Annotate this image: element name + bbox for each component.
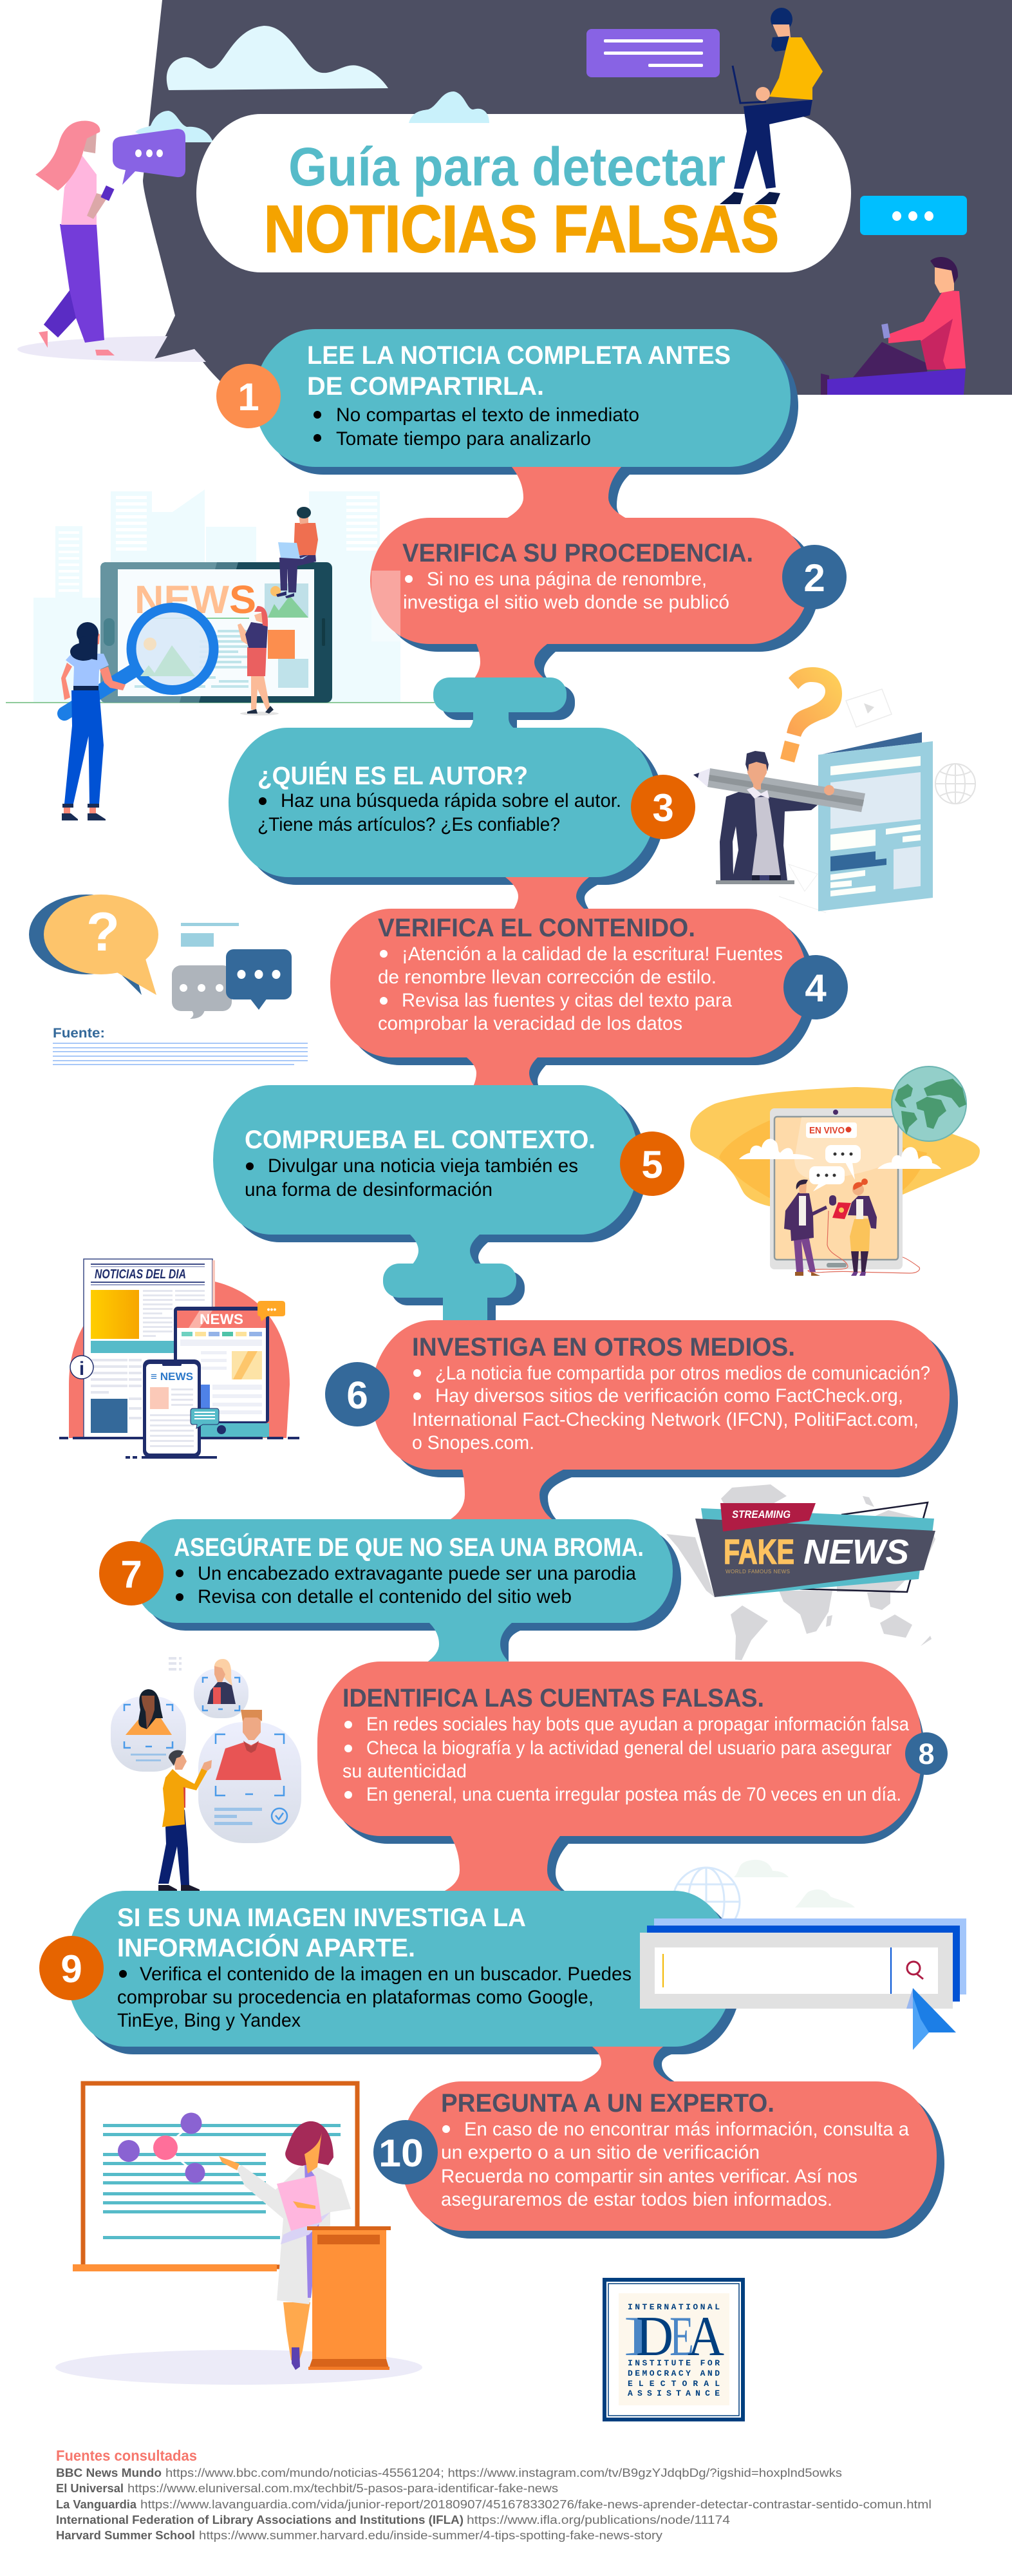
pencil [707, 768, 865, 812]
newspaper title: NOTICIAS DEL DIA [95, 1267, 186, 1282]
step 3 text: ¿Tiene más artículos? ¿Es confiable? [258, 814, 560, 835]
step 10 text: aseguraremos de estar todos bien informados. [441, 2189, 832, 2210]
step 7 text: Revisa con detalle el contenido del sitio web [198, 1586, 572, 1607]
illustration: live interview on tablet [690, 1066, 980, 1276]
folder [277, 2175, 322, 2231]
connector 2 to 3 [474, 644, 556, 683]
step 2 text [403, 569, 729, 613]
phone news word: ≡ NEWS [151, 1370, 193, 1383]
author head [747, 762, 767, 790]
badge 2: 2 [803, 556, 825, 600]
gray chat bubble [172, 965, 232, 1011]
streaming label: STREAMING [732, 1508, 791, 1520]
speech bubbles [825, 1145, 861, 1163]
step 6 text: ¿La noticia fue compartida por otros medios de comunicación? [435, 1363, 930, 1384]
fake word: FAKE [724, 1533, 794, 1571]
step 4 text: ¡Atención a la calidad de la escritura! Fuentes [402, 943, 783, 965]
step 10 panel [373, 2081, 944, 2239]
step 7 text [176, 1563, 636, 1607]
illustration: fake profiles [111, 1657, 301, 1891]
man on tablet with laptop [279, 554, 316, 592]
small bars [181, 923, 239, 926]
connector 3 to 4 [505, 877, 597, 914]
badge 8: 8 [918, 1738, 935, 1770]
illustration: live interview on tablet: EN VIVO [809, 1125, 845, 1136]
connector pad teal with neck [433, 677, 575, 734]
step 10 text: un experto o a un sitio de verificación [441, 2142, 760, 2163]
badge 5 [620, 1132, 684, 1196]
badge 1: 1 [238, 375, 259, 419]
profile card big [198, 1722, 301, 1843]
skyline tint over panel [371, 571, 400, 641]
sources list [56, 2467, 932, 2542]
connector 1 to 2 [505, 467, 636, 526]
step 6 panel [325, 1320, 958, 1477]
connector pad teal with neck 2 [383, 1264, 525, 1324]
step 4 text: comprobar la veracidad de los datos [378, 1013, 682, 1034]
illustration: news on devices: ••• [267, 1304, 276, 1314]
logo: International IDEA: INTERNATIONAL [628, 2302, 720, 2312]
cursor arrow [906, 1988, 913, 2009]
illustration: author with pencil and brochure [693, 667, 975, 913]
brochure [823, 732, 922, 754]
illustration: presenter with board [55, 2083, 422, 2385]
step 3 text: Haz una búsqueda rápida sobre el autor. [281, 790, 621, 811]
board [83, 2083, 357, 2267]
connector 4 to 5 [467, 1057, 546, 1092]
icon: purple text message [586, 29, 720, 77]
badge 2 [782, 545, 847, 609]
step 7 panel [99, 1519, 681, 1631]
logo: International IDEA: E [670, 2306, 694, 2368]
phone [143, 1359, 201, 1457]
step 2 text: investiga el sitio web donde se publicó [403, 592, 729, 613]
connector 7 to 8 [426, 1623, 520, 1664]
badge 10 [373, 2120, 438, 2184]
step 5 panel [213, 1085, 684, 1242]
hand [293, 2201, 315, 2209]
step 1 bullets: No compartas el texto de inmediato [336, 404, 639, 426]
step 5 heading: COMPRUEBA EL CONTEXTO. [245, 1126, 595, 1154]
badge 4 [783, 955, 848, 1019]
step 7 text: Un encabezado extravagante puede ser una parodia [198, 1563, 636, 1584]
illustration: news on devices [59, 1259, 299, 1459]
badge 9: 9 [61, 1947, 82, 1991]
tablet [174, 1307, 269, 1423]
salmon dome [69, 1277, 290, 1438]
profile card left [111, 1696, 186, 1772]
badge 8 [905, 1732, 948, 1775]
step 10 text: Recuerda no compartir sin antes verificar. Así nos [441, 2166, 857, 2187]
icon: cyan typing bubble [860, 196, 967, 235]
tablet news word: NEWS [200, 1311, 243, 1327]
step 8 text: En general, una cuenta irregular postea más de 70 veces en un día. [366, 1784, 901, 1805]
magnifying glass [64, 672, 132, 714]
sources list: https://www.bbc.com/mundo/noticias-45561204; https://www.instagram.com/tv/B9gzYJdqbDg/?igshid=hoxplnd5owks [165, 2467, 842, 2479]
step 9 text: TinEye, Bing y Yandex [117, 2010, 301, 2031]
title panel [196, 114, 851, 272]
illustration: question and chat bubbles: ? [86, 902, 120, 963]
step 9 heading line 2: INFORMACIÓN APARTE. [117, 1933, 415, 1962]
logo: International IDEA: INSTITUTE FOR [628, 2358, 720, 2368]
blonde avatar [207, 1682, 236, 1704]
title line 2: NOTICIAS FALSAS [264, 192, 779, 266]
logo: International IDEA: ASSISTANCE [628, 2389, 720, 2398]
blue chat bubble [226, 949, 292, 999]
envelope outlines [779, 864, 826, 913]
step 10 heading: PREGUNTA A UN EXPERTO. [441, 2089, 774, 2117]
tablet [100, 562, 332, 703]
logo: International IDEA: ELECTORAL [628, 2379, 720, 2389]
badge 7: 7 [120, 1553, 142, 1596]
illustration: news on devices: i [79, 1358, 84, 1379]
step 1 bullets: Tomate tiempo para analizarlo [336, 428, 591, 450]
illustration: man sitting with phone [821, 257, 966, 395]
step 8 panel [317, 1662, 948, 1844]
woman shadow [17, 336, 206, 362]
news wordmark: NEWS [135, 578, 256, 621]
source lines [53, 1043, 308, 1065]
mic cable [808, 1211, 919, 1273]
step 9 text [117, 1964, 632, 2031]
illustration: question and chat bubbles [29, 895, 292, 1019]
info bubble [70, 1356, 93, 1379]
icon: purple bubble [113, 129, 185, 185]
news word: NEWS [803, 1533, 909, 1571]
step 2 heading: VERIFICA SU PROCEDENCIA. [402, 539, 753, 567]
hair and face [285, 2121, 333, 2166]
step 1 bullets [314, 404, 639, 450]
step 6 text: o Snopes.com. [412, 1432, 534, 1454]
play card [846, 689, 892, 727]
globe [935, 764, 975, 804]
step 1 panel [216, 329, 798, 475]
standing man [158, 1810, 189, 1885]
step 10 text: En caso de no encontrar más información, consulta a [464, 2119, 909, 2140]
step 10 text [441, 2119, 909, 2210]
clouds [739, 1139, 814, 1159]
profile card top [194, 1669, 248, 1718]
step 1 heading line 2: DE COMPARTIRLA. [307, 372, 544, 401]
presenter leg [283, 2302, 310, 2360]
step 4 heading: VERIFICA EL CONTENIDO. [378, 914, 695, 942]
connector 5 to pad [410, 1235, 488, 1269]
badge 6: 6 [346, 1374, 368, 1417]
badge 5: 5 [641, 1143, 663, 1186]
step 4 panel [330, 909, 848, 1065]
newspaper [84, 1259, 212, 1438]
icon: large cloud [167, 26, 388, 90]
step 4 text [378, 943, 783, 1034]
question mark [787, 667, 842, 737]
title line 1: Guía para detectar [288, 137, 726, 197]
big question bubble [29, 895, 144, 974]
icon: cloud behind bubble [135, 111, 213, 142]
badge 7 [99, 1541, 164, 1605]
step 4 text: Revisa las fuentes y citas del texto para [402, 990, 732, 1011]
woman avatar [126, 1718, 172, 1735]
step 5 text [245, 1155, 578, 1200]
network nodes [129, 2125, 195, 2173]
logo: International IDEA: A [688, 2306, 724, 2368]
podium [312, 2230, 386, 2360]
step 3 heading: ¿QUIÉN ES EL AUTOR? [258, 761, 528, 790]
orange chat [258, 1301, 285, 1321]
woman in skirt [240, 712, 279, 715]
badge 6 [325, 1362, 389, 1426]
illustration: man sitting on title with laptop [720, 8, 823, 204]
sources list: La Vanguardia [56, 2498, 137, 2511]
illustration: pale globe and clouds [673, 1860, 855, 1936]
step 7 heading: ASEGÚRATE DE QUE NO SEA UNA BROMA. [174, 1532, 644, 1562]
fake news banner [695, 1502, 935, 1597]
step 3 panel [229, 728, 695, 885]
step 2 text: Si no es una página de renombre, [427, 569, 707, 590]
baselines [59, 1437, 299, 1459]
illustration: news tablet with people [6, 507, 435, 820]
step 9 text: Verifica el contenido de la imagen en un buscador. Puedes [140, 1964, 632, 1985]
step 1 heading: LEE LA NOTICIA COMPLETA ANTES [307, 341, 731, 370]
book [832, 1202, 851, 1219]
step 8 text: En redes sociales hay bots que ayudan a propagar información falsa [366, 1714, 909, 1735]
sources list: https://www.lavanguardia.com/vida/junior-report/20180907/451678330276/fake-news-aprender-detectar-contrastar-sentido-comun.html [140, 2498, 932, 2511]
floor shadow [55, 2350, 422, 2385]
step 8 text [342, 1714, 909, 1805]
globe [892, 1066, 966, 1141]
man avatar [216, 1742, 281, 1780]
badge 1 [216, 364, 281, 428]
logo: International IDEA: DEMOCRACY AND [628, 2369, 720, 2378]
badge 10: 10 [379, 2132, 424, 2175]
coat [237, 2161, 351, 2304]
step 9 panel [39, 1891, 742, 2054]
step 2 panel [370, 518, 847, 652]
step 3 text [258, 790, 621, 835]
teal chat [191, 1408, 219, 1428]
sources list: International Federation of Library Associations and Institutions (IFLA) [56, 2514, 464, 2526]
connector 6 to 7 [449, 1470, 572, 1525]
badge 3: 3 [652, 786, 674, 829]
sources heading: Fuentes consultadas [56, 2447, 197, 2464]
step 9 heading: SI ES UNA IMAGEN INVESTIGA LA [117, 1904, 526, 1932]
badge 3 [631, 775, 695, 839]
illustration: search window with cursor [640, 1918, 966, 2050]
step 5 text: Divulgar una noticia vieja también es [268, 1155, 578, 1177]
icon: small cloud on title [409, 91, 489, 123]
sources list: El Universal [56, 2482, 124, 2495]
magnifier icon [907, 1962, 920, 1975]
source label: Fuente: [53, 1026, 105, 1041]
sources list: https://www.eluniversal.com.mx/techbit/5-pasos-para-identificar-fake-news [127, 2482, 558, 2495]
step 8 heading: IDENTIFICA LAS CUENTAS FALSAS. [342, 1684, 764, 1712]
man in suit [720, 789, 818, 880]
step 5 text: una forma de desinformación [245, 1179, 492, 1200]
woman interviewee [850, 1218, 870, 1251]
step 6 heading: INVESTIGA EN OTROS MEDIOS. [412, 1333, 795, 1361]
step 4 text: de renombre llevan corrección de estilo. [378, 967, 717, 988]
sources list: https://www.ifla.org/publications/node/11174 [467, 2514, 730, 2526]
live tag [806, 1122, 857, 1138]
sources list: BBC News Mundo [56, 2467, 162, 2479]
step 9 text: comprobar su procedencia en plataformas como Google, [117, 1987, 594, 2008]
logo: International IDEA: D [636, 2306, 673, 2368]
sources list: https://www.summer.harvard.edu/inside-summer/4-tips-spotting-fake-news-story [199, 2529, 662, 2542]
reporter man [794, 1226, 816, 1272]
yellow blob [690, 1087, 980, 1206]
header dark speech-bubble background [143, 0, 1012, 395]
step 6 text [412, 1363, 930, 1454]
illustration: pale city skyline [33, 489, 400, 703]
logo: International IDEA [604, 2280, 743, 2420]
step 8 text: su autenticidad [342, 1761, 467, 1782]
illustration: woman with phone [17, 120, 206, 362]
connector 9 to 10 [574, 2047, 684, 2087]
tagline: WORLD FAMOUS NEWS [726, 1569, 790, 1575]
badge 9 [39, 1936, 104, 2000]
connector 8 to 9 [442, 1836, 573, 1897]
logo: International IDEA: I [623, 2306, 655, 2368]
step 6 text: International Fact-Checking Network (IFCN), PolitiFact.com, [412, 1409, 919, 1430]
decorative dashes [169, 1657, 182, 1671]
badge 4: 4 [805, 967, 827, 1010]
woman in blue [61, 663, 72, 700]
ground line [6, 702, 435, 703]
step 6 text: Hay diversos sitios de verificación como FactCheck.org, [435, 1385, 903, 1406]
tablet frame [770, 1108, 903, 1269]
step 8 text: Checa la biografía y la actividad general del usuario para asegurar [366, 1738, 892, 1759]
sources list: Harvard Summer School [56, 2529, 195, 2542]
illustration: world map [666, 1484, 935, 1660]
